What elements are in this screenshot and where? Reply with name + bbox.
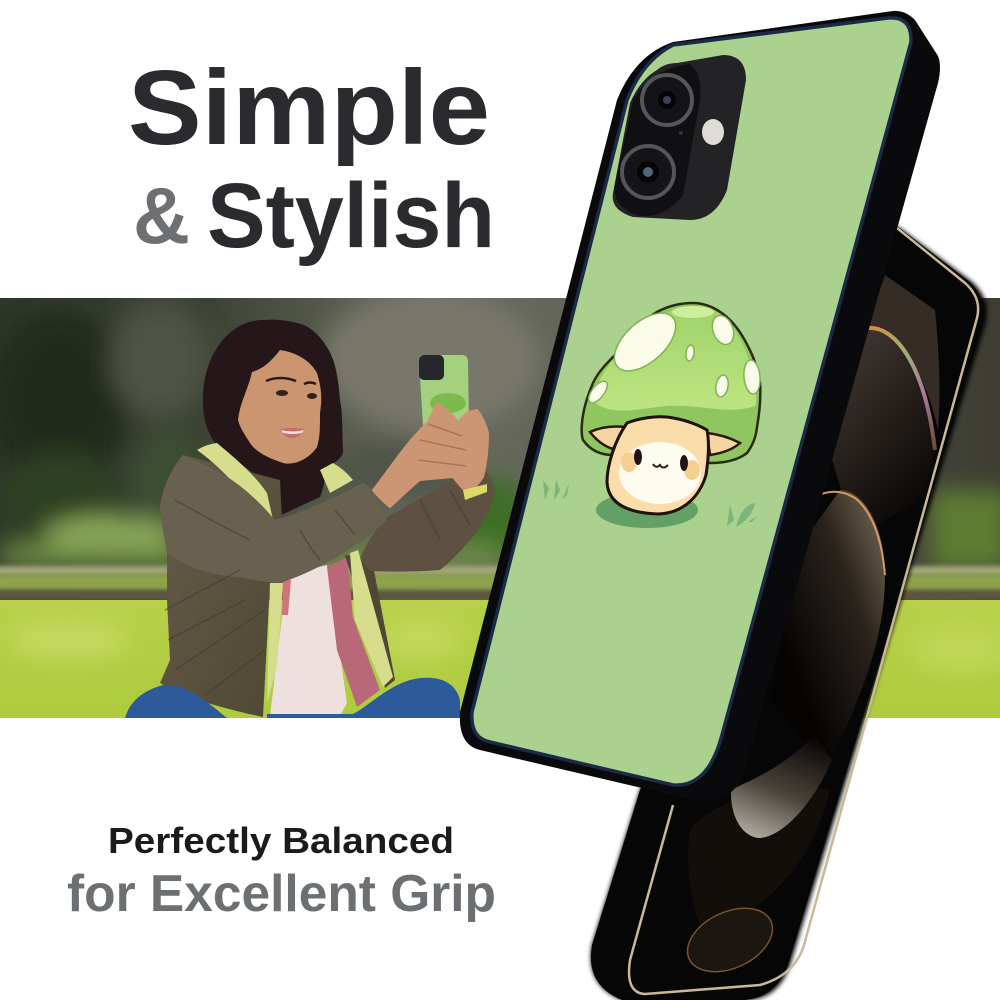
caption [67,820,496,923]
case green face [472,18,911,785]
shirt [270,565,347,716]
grass tufts [543,480,757,527]
title: & [133,171,190,260]
far arm [360,473,494,572]
jeans [125,678,460,718]
near arm [160,455,387,583]
caption: Perfectly Balanced [108,820,454,861]
mushroom illustration [543,302,761,528]
back phone [591,226,987,1000]
hands [373,403,488,507]
spots [585,302,761,406]
head [607,417,709,514]
mini phone [419,355,469,425]
title: Simple [128,49,490,167]
hair [203,320,343,517]
title [128,49,495,267]
front phone case [460,11,940,801]
quilting lines [165,490,470,695]
facial features [266,378,317,438]
title: Stylish [207,165,495,267]
gold frame [629,228,978,994]
face [238,350,321,464]
jacket lining [197,443,393,703]
plaid shirt [327,557,380,707]
fingers [418,424,466,466]
shadow [596,492,698,528]
woman taking a selfie [125,320,494,718]
camera island [613,55,746,220]
wristband [463,484,487,500]
jacket body [160,455,285,717]
gills [590,427,740,455]
cap [582,303,760,463]
face [619,442,701,504]
caption: for Excellent Grip [67,865,496,923]
wallpaper [677,275,939,984]
jacket right front [345,555,395,688]
photo band: park background [0,290,1000,718]
